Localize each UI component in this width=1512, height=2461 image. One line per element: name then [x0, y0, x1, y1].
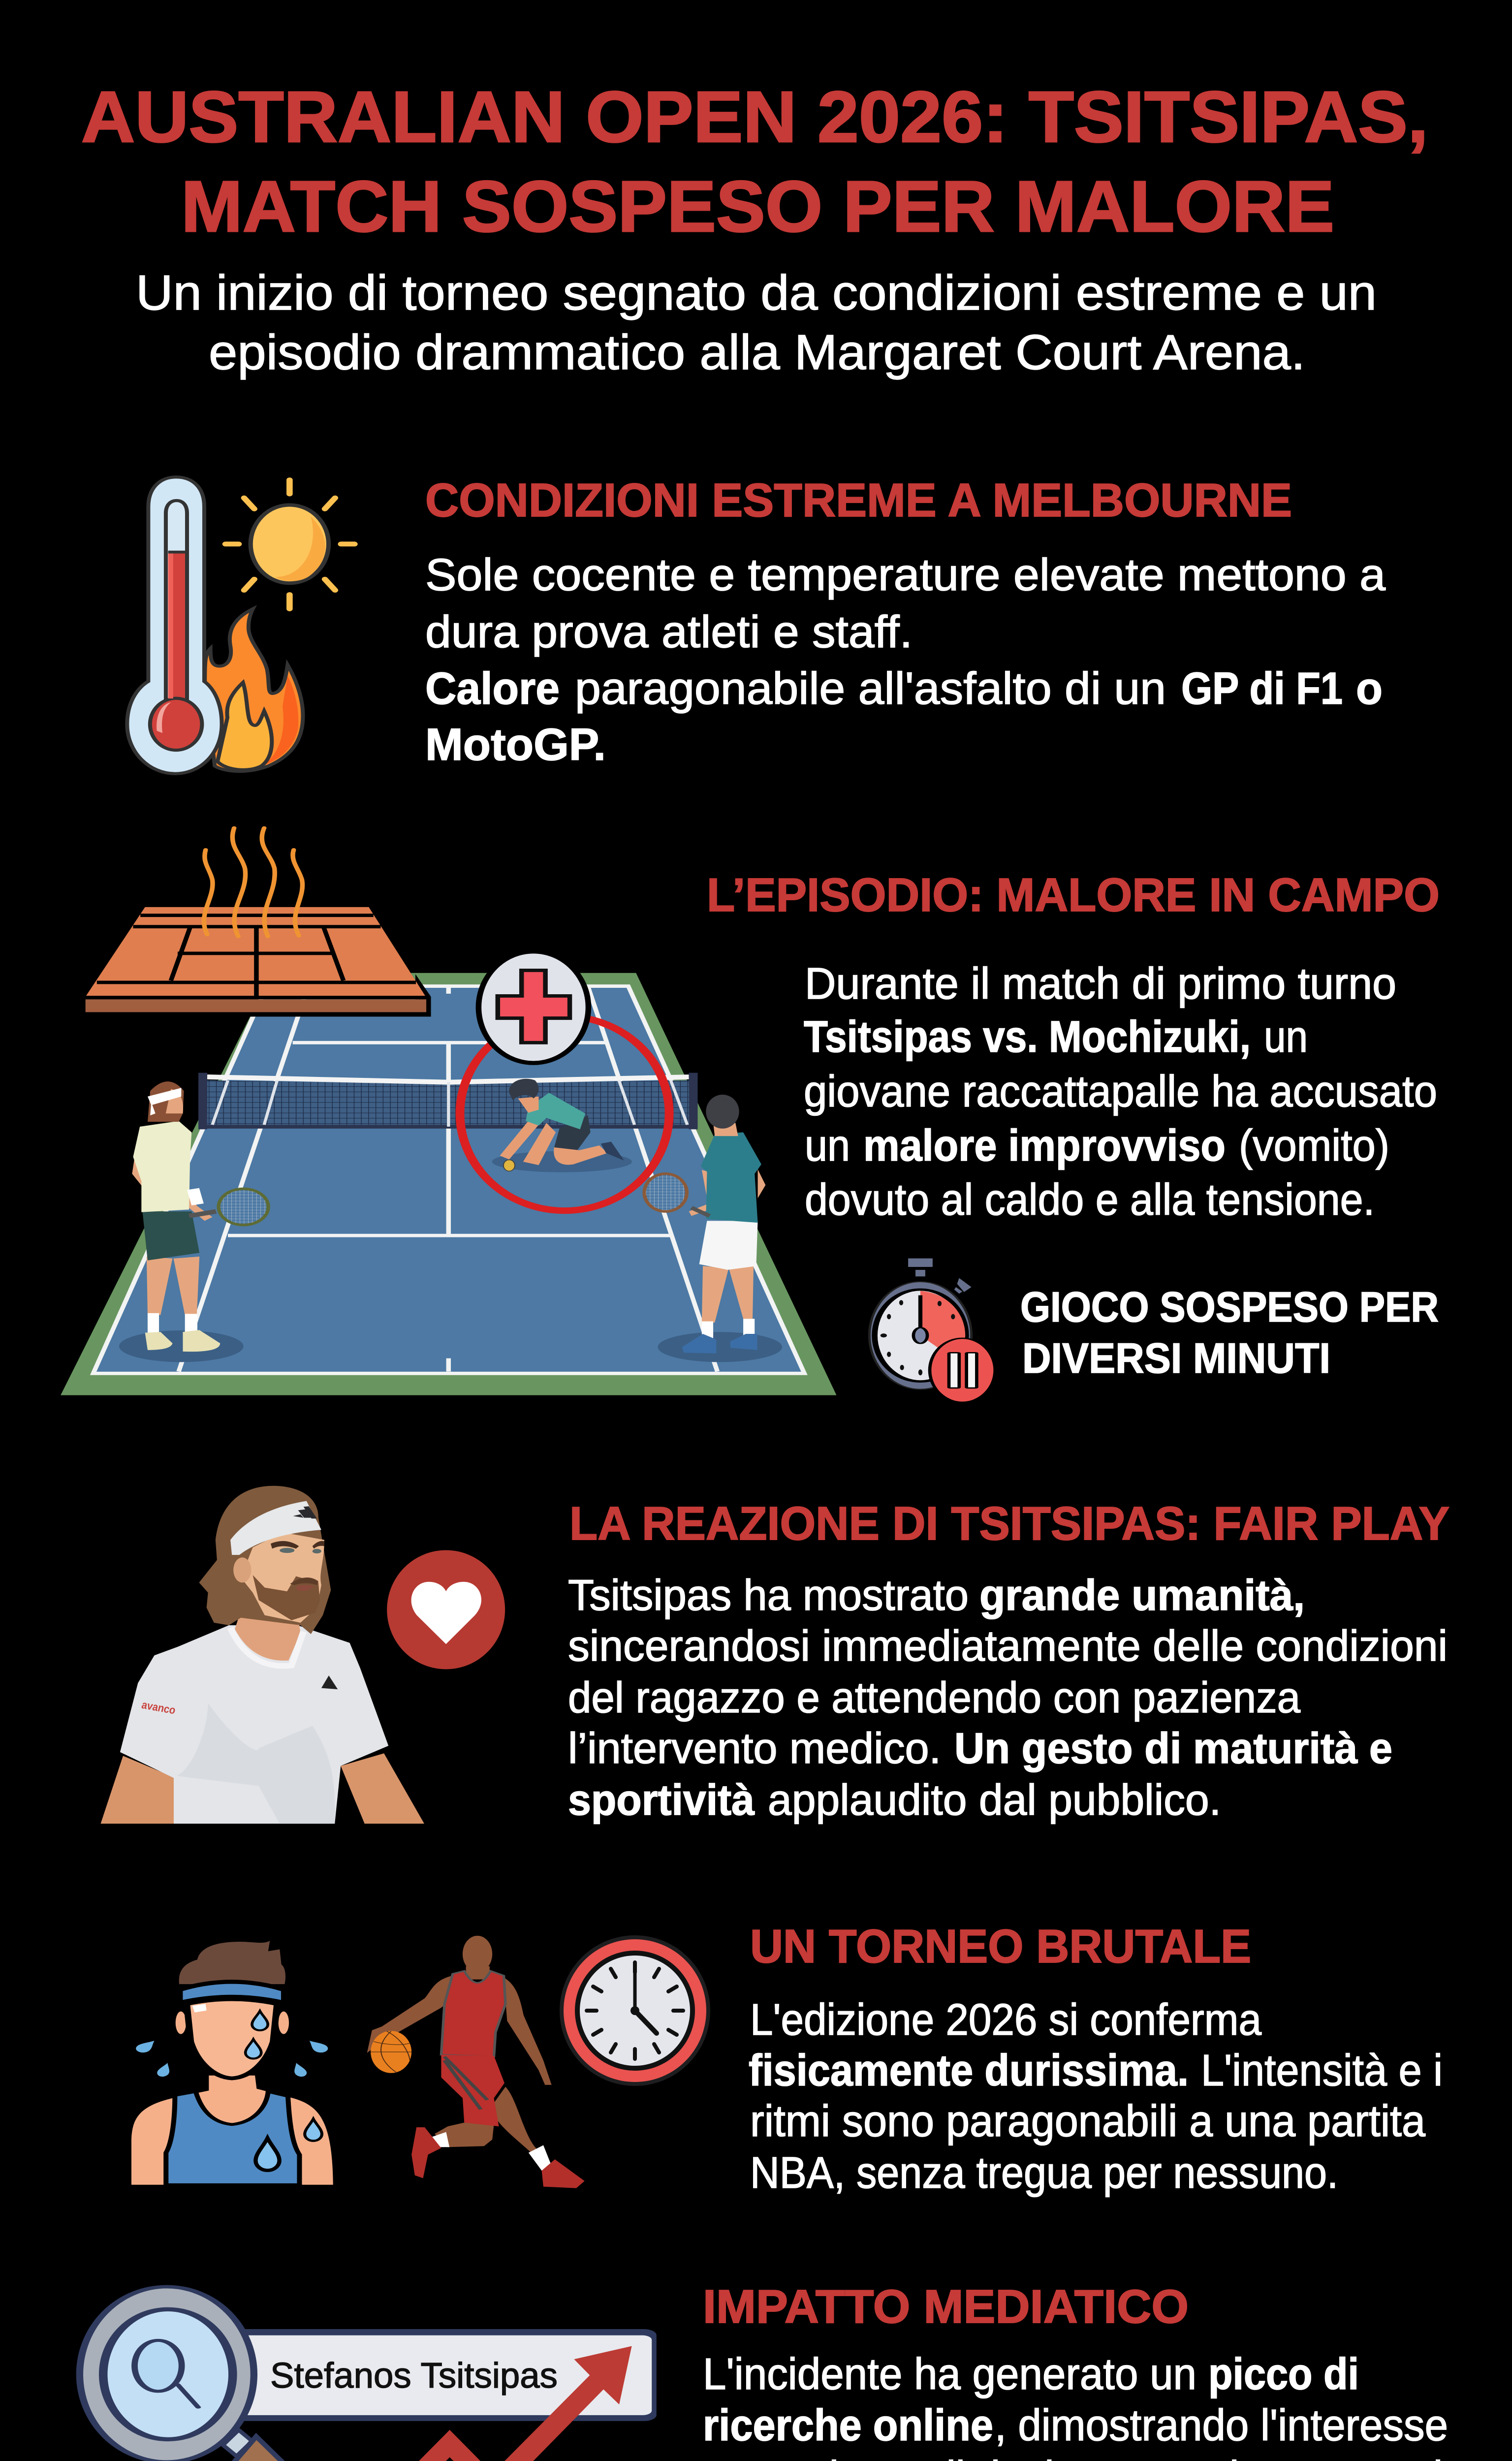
left player — [119, 1081, 268, 1362]
text block: fair play: Tsitsipas ha mostrato — [568, 1571, 969, 1619]
text block: condizioni estreme: o — [1356, 663, 1383, 714]
ball boy collapsed — [492, 1079, 632, 1172]
panel: episodio — [61, 828, 1440, 1402]
panel: condizioni estreme — [127, 474, 1386, 774]
text block: torneo brutale: L'intensità e i — [1201, 2046, 1443, 2095]
heading: torneo brutale: UN TORNEO BRUTALE — [750, 1920, 1251, 1973]
text block: episodio — [804, 959, 1437, 1225]
icon: search bar with magnifier and rising arrow — [80, 2287, 657, 2461]
text block: condizioni estreme: dura prova atleti e staff. — [425, 607, 913, 657]
text block: torneo brutale: fisicamente durissima. — [749, 2046, 1189, 2095]
text block: condizioni estreme: Sole cocente e temperature elevate mettono a — [425, 550, 1386, 600]
heading: episodio: L’EPISODIO: MALORE IN CAMPO — [707, 869, 1440, 921]
text block: condizioni estreme: Calore — [425, 663, 560, 714]
icon: search bar with magnifier and rising arrow: Stefanos Tsitsipas — [270, 2356, 558, 2396]
callout: gioco sospeso: GIOCO SOSPESO PER — [1020, 1284, 1439, 1331]
panel: fair play — [101, 1486, 1449, 1824]
text block: impatto mediatico: L'incidente ha generato un — [703, 2350, 1197, 2399]
text block: impatto mediatico: picco di — [1208, 2350, 1359, 2399]
panel: impatto mediatico — [80, 2280, 1480, 2461]
callout: gioco sospeso — [1020, 1284, 1439, 1382]
text block: episodio: Tsitsipas vs. Mochizuki, — [804, 1012, 1251, 1062]
red circle around the ball boy — [460, 1016, 669, 1211]
text block: episodio: un — [1264, 1012, 1308, 1062]
subtitle — [136, 265, 1377, 380]
icon: sweating athlete — [131, 1941, 333, 2185]
text block: episodio: malore improvviso — [863, 1121, 1226, 1170]
clay court with heat waves — [86, 828, 431, 1017]
text block: torneo brutale: L'edizione 2026 si conferma — [750, 1995, 1262, 2045]
text block: condizioni estreme: paragonabile all'asfalto di un — [575, 663, 1166, 714]
text block: condizioni estreme: GP di F1 — [1181, 663, 1343, 714]
illustration: tennis court with players — [61, 828, 836, 1395]
subtitle: episodio drammatico alla Margaret Court Arena. — [209, 325, 1305, 380]
illustration: Tsitsipas portrait: avanco — [140, 1699, 177, 1717]
text block: fair play: grande umanità, — [979, 1571, 1305, 1619]
text block: episodio: dovuto al caldo e alla tensione. — [805, 1175, 1375, 1225]
icon: heart badge — [387, 1550, 505, 1669]
illustration: Tsitsipas portrait — [101, 1486, 424, 1824]
text block: fair play — [568, 1571, 1448, 1824]
text block: impatto mediatico: ricerche online — [703, 2401, 993, 2450]
text block: torneo brutale — [749, 1995, 1443, 2198]
text block: episodio: giovane raccattapalle ha accusato — [804, 1067, 1437, 1116]
text block: fair play: sportività — [568, 1775, 755, 1824]
text block: fair play: l’intervento medico. — [568, 1724, 941, 1772]
court surface — [61, 973, 836, 1395]
text block: torneo brutale: ritmi sono paragonabili a una partita — [750, 2097, 1426, 2146]
text block: fair play: Un gesto di maturità e — [954, 1724, 1392, 1772]
icon: stopwatch with pause — [869, 1259, 995, 1402]
title — [81, 77, 1428, 247]
tennis net — [198, 1073, 697, 1129]
title: MATCH SOSPESO PER MALORE — [181, 166, 1334, 247]
icon: basketball player — [367, 1936, 585, 2188]
heading: impatto mediatico: IMPATTO MEDIATICO — [703, 2280, 1189, 2333]
title: AUSTRALIAN OPEN 2026: TSITSIPAS, — [81, 77, 1428, 158]
text block: impatto mediatico: , dimostrando l'interesse — [995, 2401, 1448, 2450]
text block: episodio: Durante il match di primo turno — [805, 959, 1396, 1009]
icon: clock — [560, 1935, 710, 2086]
icon: medical cross badge — [478, 951, 588, 1063]
text block: episodio: un — [805, 1121, 850, 1170]
text block: condizioni estreme — [425, 550, 1386, 770]
text block: torneo brutale: NBA, senza tregua per nessuno. — [750, 2148, 1338, 2198]
callout: gioco sospeso: DIVERSI MINUTI — [1022, 1335, 1330, 1382]
heading: fair play: LA REAZIONE DI TSITSIPAS: FAIR PLAY — [569, 1497, 1449, 1550]
text block: fair play: del ragazzo e attendendo con pazienza — [568, 1673, 1300, 1722]
right player — [644, 1095, 782, 1362]
text block: fair play: applaudito dal pubblico. — [768, 1775, 1221, 1824]
panel: torneo brutale — [131, 1920, 1443, 2198]
text block: impatto mediatico — [703, 2350, 1480, 2461]
icon: thermometer, sun and flame — [127, 477, 354, 774]
text block: condizioni estreme: MotoGP. — [425, 720, 606, 770]
heading: condizioni estreme: CONDIZIONI ESTREME A MELBOURNE — [425, 474, 1292, 527]
subtitle: Un inizio di torneo segnato da condizioni estreme e un — [136, 265, 1377, 320]
text block: episodio: (vomito) — [1239, 1121, 1389, 1170]
text block: fair play: sincerandosi immediatamente delle condizioni — [568, 1621, 1448, 1670]
